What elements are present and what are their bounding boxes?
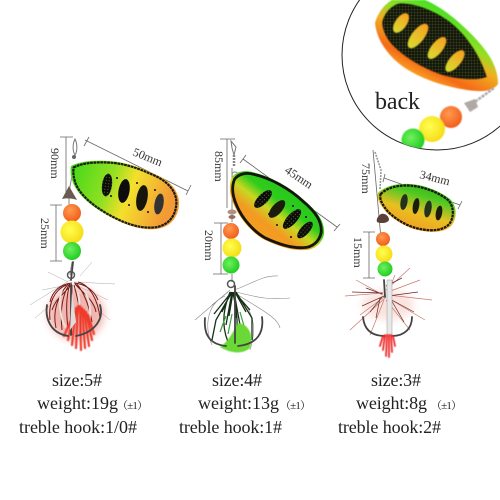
blade — [71, 161, 179, 229]
dimension: 15mm: 15mm — [351, 237, 365, 268]
swivel and wire — [69, 139, 78, 275]
dimension: 45mm — [240, 155, 340, 231]
dimension: 15mm — [351, 232, 375, 278]
inset: back view of the blade — [342, 0, 500, 152]
dimension: 34mm: 34mm — [418, 167, 452, 188]
dimension: 50mm: 50mm — [131, 145, 165, 170]
lure size 4 — [195, 139, 340, 352]
dimension: 25mm: 25mm — [38, 218, 52, 249]
dimension: 34mm — [383, 167, 462, 209]
hook with red feather — [30, 262, 115, 350]
inset circle outline — [342, 0, 500, 150]
lure size 5 — [30, 137, 191, 350]
dimension: 20mm: 20mm — [202, 230, 216, 261]
weight label: weight:13g — [198, 393, 279, 413]
hook with red feather — [345, 268, 432, 357]
size label: size:5# — [52, 370, 102, 390]
swivel and wire — [228, 141, 238, 282]
weight label: weight:8g — [356, 393, 427, 413]
blade — [378, 184, 456, 232]
dimension: 90mm — [48, 137, 73, 194]
beads — [376, 232, 392, 276]
tolerance: （±1） — [280, 399, 311, 412]
back label: back — [375, 89, 420, 115]
tolerance: （±1） — [431, 399, 462, 412]
blade — [230, 171, 324, 250]
size label: size:4# — [212, 370, 262, 390]
weight label: weight:19g — [37, 393, 118, 413]
treble hook label: treble hook:2# — [338, 417, 441, 437]
beads — [60, 204, 84, 260]
treble hook label: treble hook:1# — [179, 417, 282, 437]
cone weight — [62, 186, 77, 200]
size label: size:3# — [371, 370, 421, 390]
specs: size 5 — [19, 370, 148, 437]
dimension: 85mm: 85mm — [212, 151, 226, 182]
specs: size 4 — [179, 370, 311, 437]
swivel and wire — [375, 152, 381, 190]
dimension: 85mm — [212, 139, 235, 208]
dimension: 90mm: 90mm — [48, 148, 62, 179]
beads — [222, 223, 242, 274]
hook with green feather — [195, 276, 290, 352]
back blade — [375, 0, 498, 152]
lure size 3 — [345, 150, 462, 357]
tolerance: （±1） — [117, 399, 148, 412]
specs: size 3 — [338, 370, 462, 437]
dimension: 50mm — [84, 137, 191, 195]
dimension: 75mm: 75mm — [359, 163, 373, 194]
treble hook label: treble hook:1/0# — [19, 417, 137, 437]
dimension: 75mm — [359, 150, 382, 250]
dimension: 25mm — [38, 205, 62, 261]
cone weight — [377, 214, 389, 223]
dimension: 45mm: 45mm — [282, 163, 316, 192]
dimension: 20mm — [202, 223, 228, 274]
